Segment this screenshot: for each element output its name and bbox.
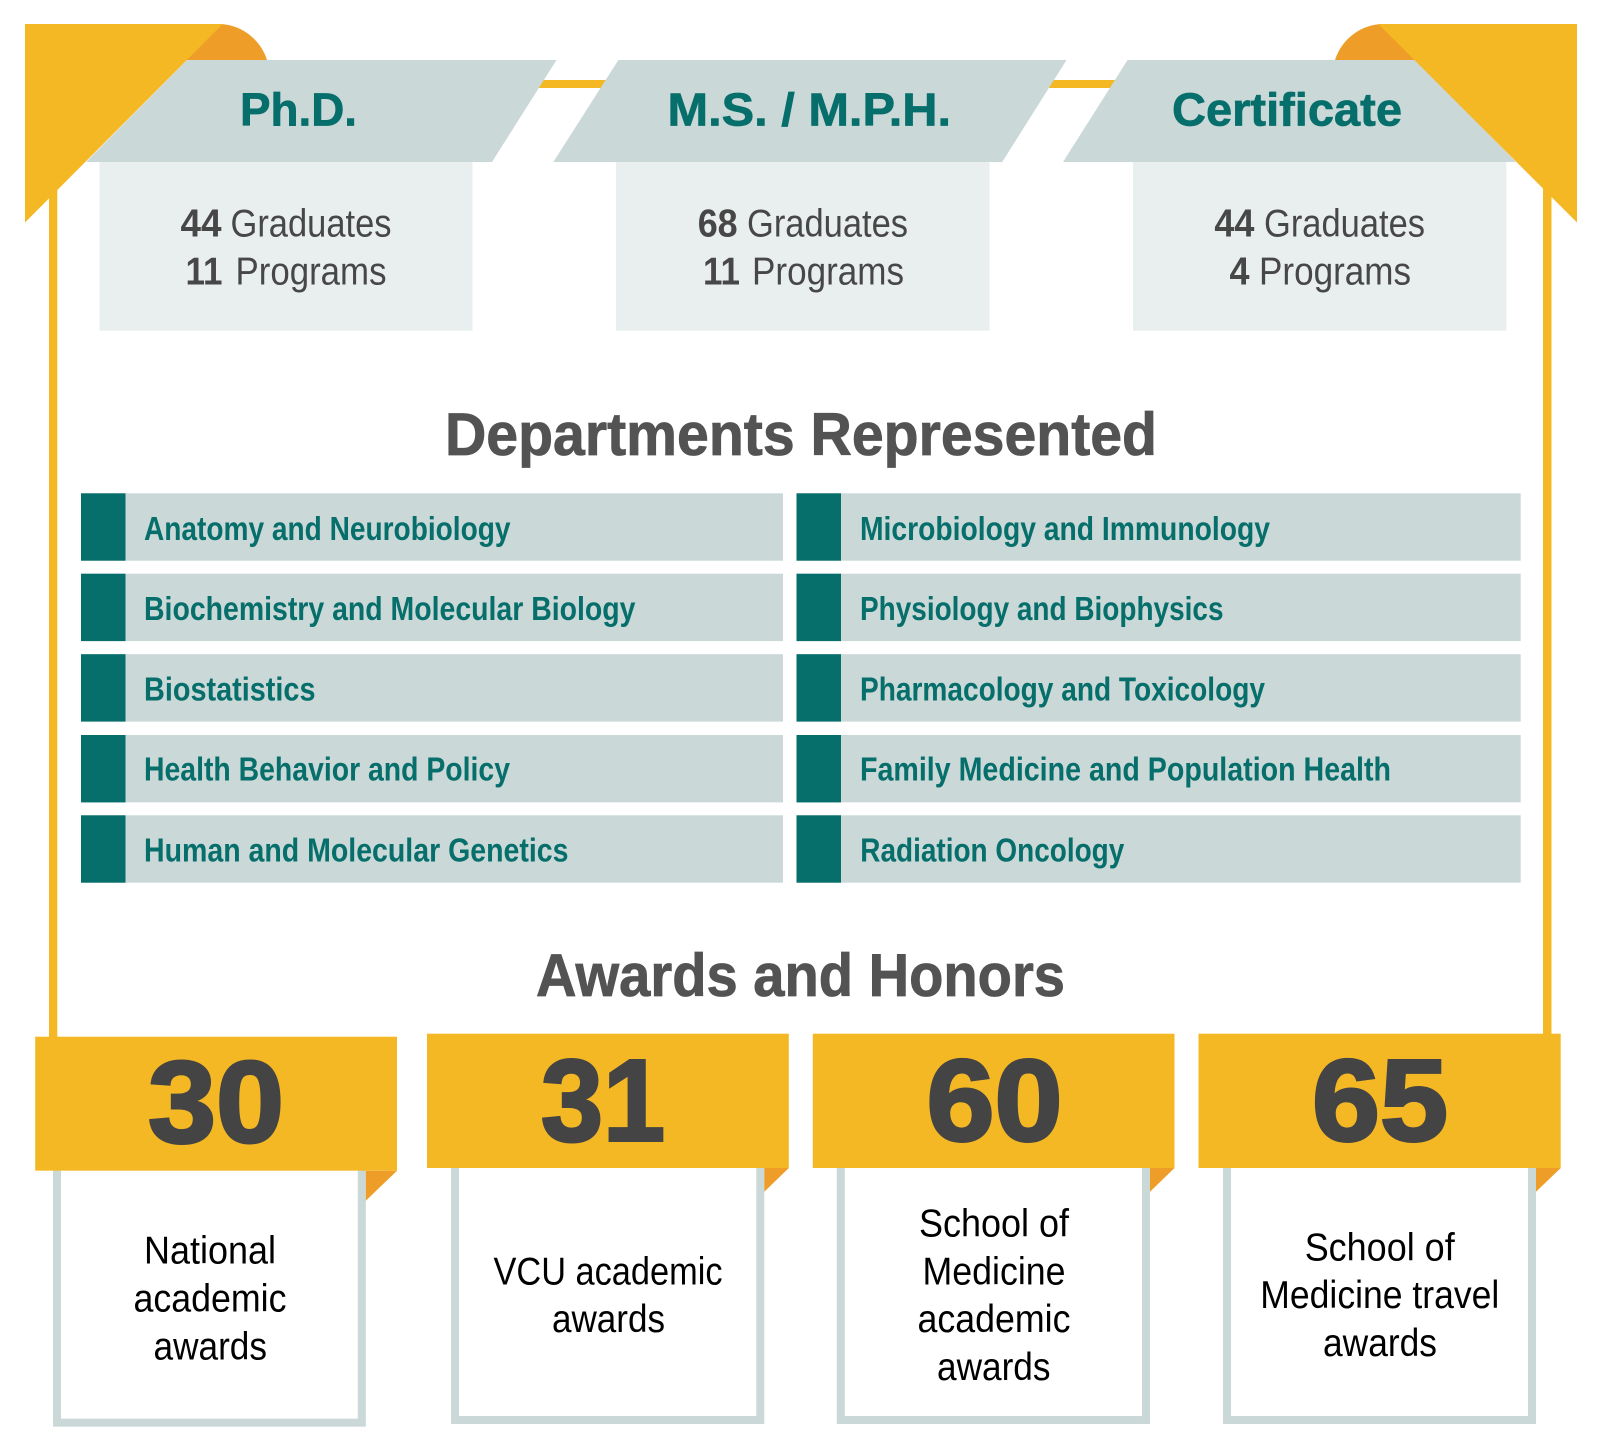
award card: 65 School of Medicine travel awards <box>1198 1034 1561 1420</box>
M.S. stats: Programs <box>752 251 904 294</box>
description: National <box>144 1229 276 1272</box>
row: Physiology and Biophysics <box>796 574 1521 641</box>
row: Health Behavior and Policy: Health Behavior and Policy <box>144 752 510 789</box>
description <box>134 1229 286 1368</box>
Ph.D. stats: 11 <box>186 251 222 294</box>
number ribbon <box>427 1034 789 1168</box>
M.S. heading: M.S. / M.P.H. <box>668 83 951 135</box>
department list: right column <box>796 493 1521 883</box>
number: 60 <box>926 1036 1062 1166</box>
row: Human and Molecular Genetics <box>81 815 783 883</box>
ribbon fold <box>366 1171 397 1201</box>
M.S. stats: Graduates <box>747 202 908 245</box>
heading: Departments Represented: Departments Represented <box>445 401 1157 468</box>
Certificate header shape <box>1063 60 1516 162</box>
Certificate stats: Programs <box>1259 251 1411 294</box>
description: School of <box>1305 1226 1455 1269</box>
row: Family Medicine and Population Health <box>796 735 1521 802</box>
row: Radiation Oncology: Radiation Oncology <box>860 832 1125 869</box>
Ph.D. stats: Programs <box>236 251 386 294</box>
row: Microbiology and Immunology: Microbiology and Immunology <box>860 511 1270 548</box>
Certificate heading: Certificate <box>1172 83 1402 135</box>
Ph.D. stats: Graduates <box>230 202 392 245</box>
number: 31 <box>541 1036 665 1166</box>
description: School of <box>919 1203 1069 1246</box>
Certificate stats box <box>1133 162 1506 331</box>
Ph.D. stats: 44 <box>180 202 222 245</box>
award card: 30 National academic awards <box>35 1037 397 1423</box>
Ph.D. stats <box>180 202 392 294</box>
number ribbon <box>813 1034 1174 1168</box>
description: awards <box>1323 1322 1437 1365</box>
row: Family Medicine and Population Health: Family Medicine and Population Health <box>860 752 1391 789</box>
row: Health Behavior and Policy <box>81 735 783 802</box>
award card: 60 School of Medicine academic awards <box>813 1034 1174 1420</box>
row: Microbiology and Immunology <box>796 493 1521 561</box>
frame: yellow border lines and connectors <box>49 80 1552 1040</box>
M.S. stats box <box>616 162 990 331</box>
panel: Ph.D. <box>86 60 556 331</box>
card box <box>1227 1160 1532 1420</box>
description <box>918 1203 1070 1389</box>
Certificate stats: Graduates <box>1264 202 1425 245</box>
M.S. stats: 11 <box>703 251 740 294</box>
corner triangle: left <box>25 24 223 222</box>
description: VCU academic <box>494 1250 722 1293</box>
row: Biochemistry and Molecular Biology: Biochemistry and Molecular Biology <box>144 591 636 628</box>
award card: 31 VCU academic awards <box>427 1034 789 1420</box>
Certificate stats: 4 <box>1230 251 1250 294</box>
description <box>1260 1226 1499 1365</box>
row: Biostatistics: Biostatistics <box>144 672 316 708</box>
description: academic <box>134 1278 286 1321</box>
panel: M.S. / M.P.H. <box>553 60 1066 331</box>
card box <box>841 1160 1146 1420</box>
ribbon fold <box>1150 1168 1174 1192</box>
number: 65 <box>1312 1036 1448 1166</box>
row: Anatomy and Neurobiology: Anatomy and Neurobiology <box>144 511 511 548</box>
ribbon fold <box>1536 1168 1561 1192</box>
row: Pharmacology and Toxicology <box>796 654 1521 722</box>
M.S. header shape <box>553 60 1066 162</box>
description: awards <box>154 1325 267 1368</box>
number: 30 <box>148 1037 284 1167</box>
row: Radiation Oncology <box>796 815 1521 883</box>
heading: Awards and Honors: Awards and Honors <box>536 942 1065 1009</box>
row: Anatomy and Neurobiology <box>81 493 783 561</box>
ribbon fold <box>764 1168 789 1192</box>
corner fold: right <box>1335 24 1422 60</box>
Ph.D. header shape <box>86 60 556 162</box>
description: awards <box>937 1346 1050 1389</box>
description: awards <box>552 1298 665 1341</box>
row: Pharmacology and Toxicology: Pharmacology and Toxicology <box>860 672 1265 708</box>
description: academic <box>918 1298 1070 1341</box>
description <box>494 1250 722 1341</box>
Certificate stats: 44 <box>1214 202 1255 245</box>
corner fold: left <box>180 24 267 60</box>
corner triangle: right <box>1378 24 1577 222</box>
description: Medicine <box>922 1250 1066 1293</box>
department list: left column <box>81 493 783 883</box>
row: Biochemistry and Molecular Biology <box>81 574 783 641</box>
row: Physiology and Biophysics: Physiology and Biophysics <box>860 591 1224 628</box>
M.S. stats <box>698 202 908 294</box>
description: Medicine travel <box>1260 1274 1499 1317</box>
panel: Certificate <box>1063 60 1516 331</box>
card box <box>57 1160 362 1423</box>
Certificate stats <box>1214 202 1425 294</box>
row: Human and Molecular Genetics: Human and Molecular Genetics <box>144 832 568 869</box>
row: Biostatistics <box>81 654 783 722</box>
M.S. stats: 68 <box>698 202 738 245</box>
Ph.D. stats box <box>100 162 472 331</box>
number ribbon <box>1198 1034 1561 1168</box>
Ph.D. heading: Ph.D. <box>240 83 357 135</box>
number ribbon <box>35 1037 397 1171</box>
card box <box>455 1160 760 1420</box>
